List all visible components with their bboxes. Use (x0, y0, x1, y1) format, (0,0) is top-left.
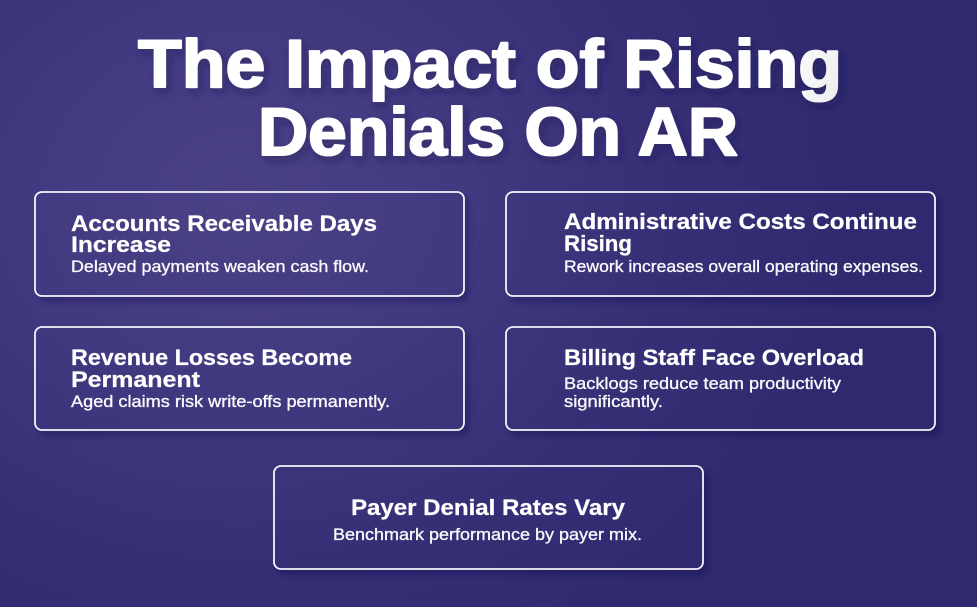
text: backlogs: significantly. (564, 393, 663, 411)
title: Denials On AR (258, 94, 738, 170)
text: aged claims: Aged claims risk write-offs permanently. (71, 393, 390, 411)
panel: accounts receivable days (35, 192, 464, 296)
heading: administrative costs: Administrative Costs Continue (564, 209, 917, 234)
text: rework: Rework increases overall operating expenses. (564, 258, 923, 276)
text: backlogs: Backlogs reduce team productivity (564, 375, 842, 393)
heading: accounts receivable days: Accounts Receivable Days (71, 211, 377, 236)
panel: payer denial rates (274, 466, 703, 569)
heading: payer denial rates: Payer Denial Rates Vary (351, 495, 626, 520)
panel: administrative costs (506, 192, 935, 296)
panel: revenue losses (35, 327, 464, 430)
panel: revenue losses: Permanent (71, 367, 201, 392)
text: benchmark: Benchmark performance by payer mix. (333, 526, 642, 544)
heading: revenue losses: Revenue Losses Become (71, 345, 352, 370)
title (138, 26, 842, 170)
title: The Impact of Rising (138, 26, 842, 102)
panel: billing staff (506, 327, 935, 430)
text: delayed payments: Delayed payments weaken cash flow. (71, 258, 369, 276)
panel: accounts receivable days: Increase (71, 232, 171, 257)
panel: administrative costs: Rising (564, 231, 632, 256)
heading: billing staff: Billing Staff Face Overload (564, 345, 864, 370)
text: backlogs (564, 375, 842, 411)
